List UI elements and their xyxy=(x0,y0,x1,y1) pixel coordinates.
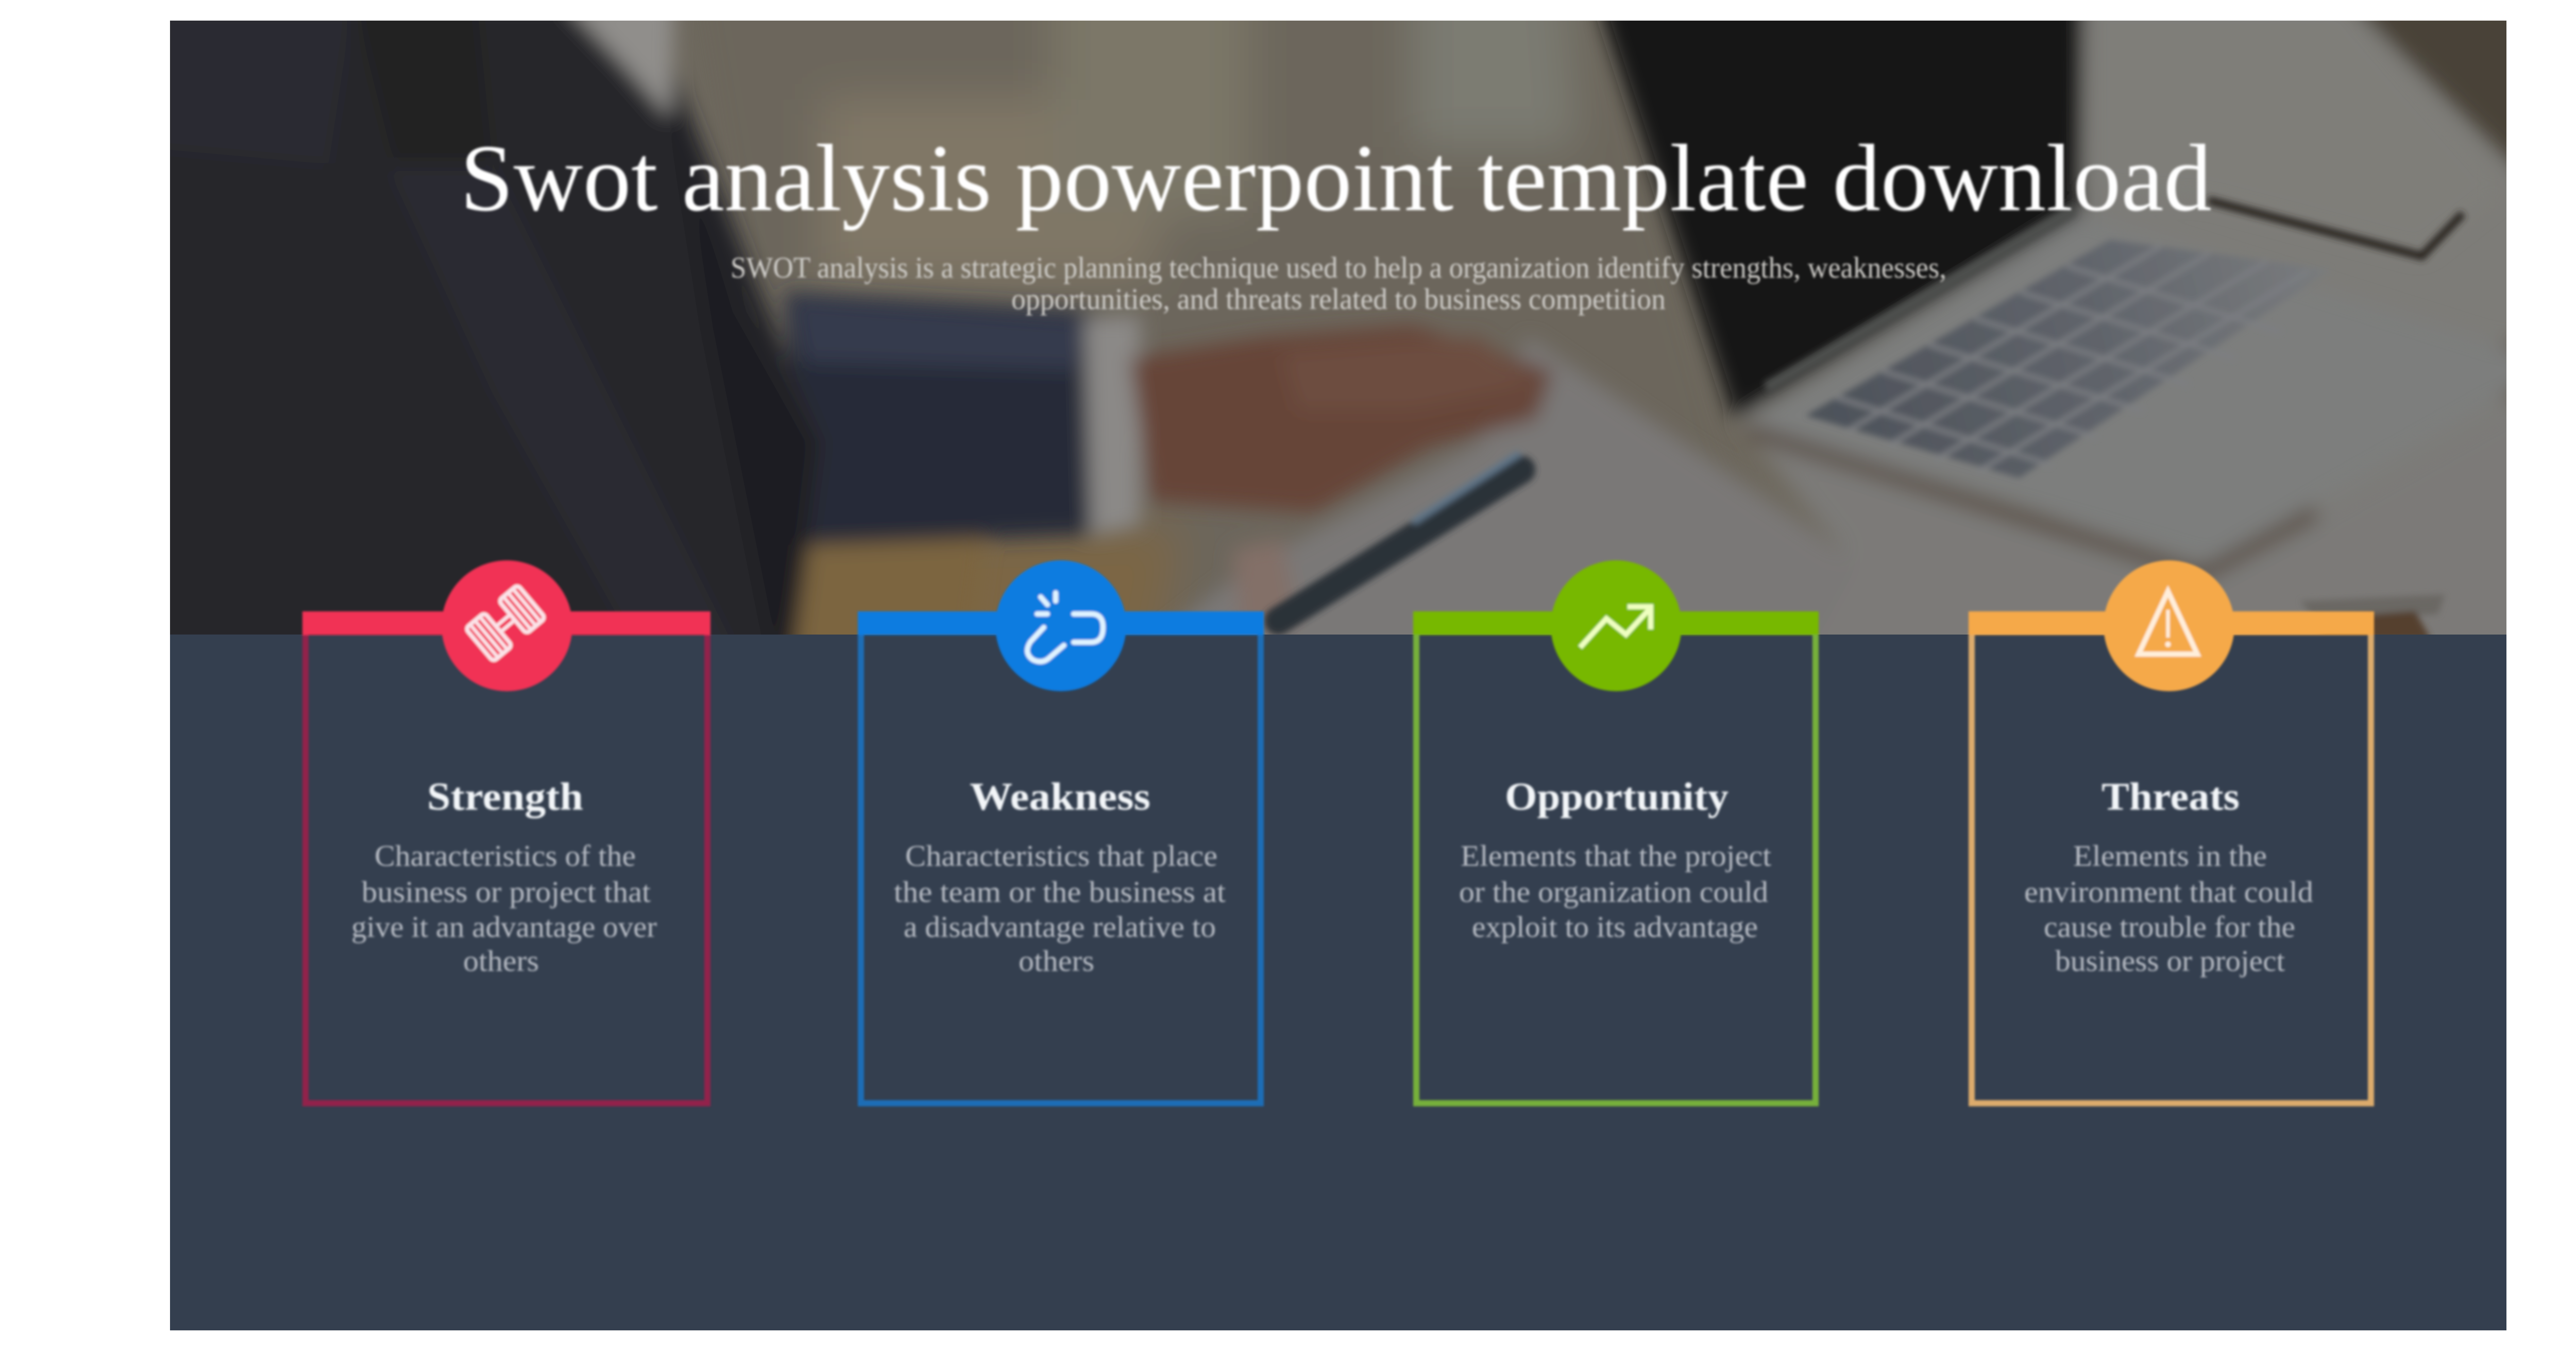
description: Threats xyxy=(2024,839,2313,978)
card: Weakness xyxy=(858,560,1264,1103)
card: Threats xyxy=(1969,560,2374,1103)
laptop edge shadow xyxy=(1748,431,2316,575)
dark desk corner xyxy=(2355,21,2506,171)
description: Weakness xyxy=(894,839,1226,978)
wall and desk tones xyxy=(666,0,1873,690)
description: Weakness: a disadvantage relative to xyxy=(904,910,1216,944)
wood below phone xyxy=(2316,611,2432,641)
description: Opportunity: or the organization could xyxy=(1459,875,1768,909)
description: Strength: Characteristics of the xyxy=(375,839,636,872)
description: Strength: give it an advantage over xyxy=(351,910,657,944)
heading: Threats: Threats xyxy=(2102,775,2240,818)
wood under sleeve xyxy=(789,534,986,657)
pen xyxy=(1278,470,1521,621)
paper on desk xyxy=(1133,337,1865,657)
background photo: businessman with laptop xyxy=(170,21,2506,635)
subtitle: opportunities, and threats related to business competition xyxy=(1011,282,1666,316)
description: Weakness: others xyxy=(1019,944,1094,978)
suit jacket xyxy=(148,0,823,657)
subtitle: SWOT analysis is a strategic planning technique used to help a organization identify strengths, weaknesses, xyxy=(731,251,1946,284)
description: Weakness: Characteristics that place xyxy=(905,839,1217,872)
notebook xyxy=(2087,0,2497,256)
shirt collar xyxy=(562,0,673,118)
subtitle xyxy=(731,251,1946,316)
title: Swot analysis powerpoint template download xyxy=(460,125,2212,231)
sleeve xyxy=(785,293,1104,545)
notebook shadow edge xyxy=(2208,200,2463,256)
description: Opportunity: exploit to its advantage xyxy=(1472,910,1758,944)
heading: Weakness: Weakness xyxy=(970,775,1150,818)
card: Opportunity xyxy=(1413,560,1819,1103)
dark navy lower panel xyxy=(170,635,2506,1330)
description: Opportunity: Elements that the project xyxy=(1461,839,1771,872)
description: Threats: business or project xyxy=(2055,944,2285,978)
description: Threats: cause trouble for the xyxy=(2044,910,2295,944)
hand xyxy=(1130,325,1553,512)
description: Strength: business or project that xyxy=(362,875,651,909)
card: Strength xyxy=(302,560,710,1103)
shirt cuff xyxy=(1084,315,1140,536)
laptop base xyxy=(1738,214,2530,562)
description: Weakness: the team or the business at xyxy=(894,875,1226,909)
icon: trend arrow xyxy=(1580,607,1651,647)
icon: warning triangle xyxy=(2139,591,2197,654)
description: Threats: environment that could xyxy=(2024,875,2313,909)
phone xyxy=(2300,594,2445,621)
wood edge at right xyxy=(2504,338,2506,403)
heading: Strength: Strength xyxy=(427,775,583,818)
description: Strength: others xyxy=(463,944,539,978)
description: Threats: Elements in the xyxy=(2073,839,2267,872)
icon: dumbbell xyxy=(465,585,546,662)
description: Opportunity xyxy=(1459,839,1771,944)
lower right desk surface xyxy=(1748,394,2530,657)
icon: broken link xyxy=(1027,593,1103,662)
heading: Opportunity: Opportunity xyxy=(1505,775,1728,818)
laptop screen xyxy=(1597,0,2083,419)
laptop hinge xyxy=(1766,210,2074,388)
description: Strength xyxy=(351,839,657,978)
keyboard xyxy=(1806,240,2331,478)
